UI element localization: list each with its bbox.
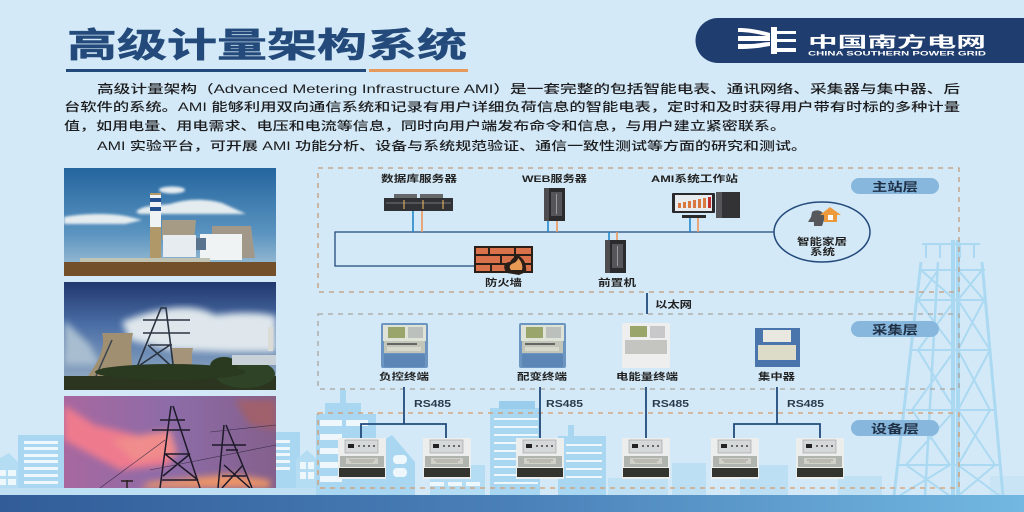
distribution terminal (517, 323, 568, 383)
label: master station layer: 主站层 (872, 179, 918, 194)
network bus lines (335, 232, 774, 266)
photo: pylons at sunset (64, 396, 276, 488)
front-end processor: 前置机 (598, 277, 637, 289)
company logo banner (696, 18, 1024, 63)
intro text block: 台软件的系统。AMI 能够利用双向通信系统和记录有用户详细负荷信息的智能电表，定时和及时获得用户带有时标的多种计量 (64, 99, 960, 114)
concentrator (755, 328, 800, 383)
panel: collection layer (318, 314, 959, 389)
company logo banner: 中国南方电网 (808, 33, 986, 51)
intro text block: 值，如用电量、用电需求、电压和电流等信息，同时向用户端发布命令和信息，与用户建立紧密联系。 (64, 118, 786, 133)
RS485 labels: RS485 (546, 398, 583, 410)
firewall (474, 246, 533, 275)
photo: cooling towers and pylon (64, 282, 276, 390)
RS485 labels: RS485 (652, 398, 689, 410)
icon: grid logo mark (738, 27, 796, 54)
load control terminal (379, 323, 430, 383)
panel: master station layer (318, 168, 959, 292)
label: device layer (851, 420, 939, 436)
label: device layer: 设备层 (871, 421, 919, 436)
RS485 labels: RS485 (414, 398, 451, 410)
AMI workstation (651, 173, 740, 218)
RS485 labels: RS485 (787, 398, 824, 410)
ethernet link: 以太网 (655, 299, 692, 311)
title: 高级计量架构系统 (67, 27, 467, 65)
label: master station layer (851, 178, 939, 194)
smart home system: 系统 (810, 246, 836, 258)
label: collection layer (851, 321, 939, 337)
intro text block (64, 81, 960, 153)
load control terminal: 负控终端 (379, 371, 430, 383)
title (66, 27, 468, 72)
concentrator: 集中器 (758, 371, 796, 383)
smart meters (338, 438, 844, 479)
panel: device layer (318, 413, 959, 488)
smart home system (774, 202, 870, 262)
database server: 数据库服务器 (381, 173, 458, 185)
icon: head with house (808, 207, 841, 226)
firewall label: 防火墙 (485, 277, 523, 289)
intro text block: 高级计量架构（Advanced Metering Infrastructure AMI）是一套完整的包括智能电表、通讯网络、采集器与集中器、后 (97, 81, 960, 96)
energy terminal (616, 323, 679, 383)
web server: WEB服务器 (522, 173, 588, 185)
transmission tower background (894, 240, 1003, 496)
AMI workstation: AMI系统工作站 (651, 173, 739, 185)
label: collection layer: 采集层 (872, 322, 918, 337)
smart home system: 智能家居 (797, 236, 847, 248)
energy terminal: 电能量终端 (616, 371, 679, 383)
RS485 connector lines (361, 387, 820, 438)
ethernet link (647, 293, 692, 314)
company logo banner: CHINA SOUTHERN POWER GRID (808, 52, 987, 58)
connectors: blue and orange links (413, 211, 698, 240)
intro text block: AMI 实验平台，可开展 AMI 功能分析、设备与系统规范验证、通信一致性测试等方面的研究和测试。 (97, 138, 807, 153)
RS485 labels (414, 398, 824, 410)
database server (381, 173, 458, 211)
front-end processor (598, 240, 637, 289)
bottom band (0, 495, 1024, 512)
photo: power plant (64, 168, 276, 276)
cityscape background (0, 390, 1024, 496)
distribution terminal: 配变终端 (517, 371, 568, 383)
web server (522, 173, 588, 221)
